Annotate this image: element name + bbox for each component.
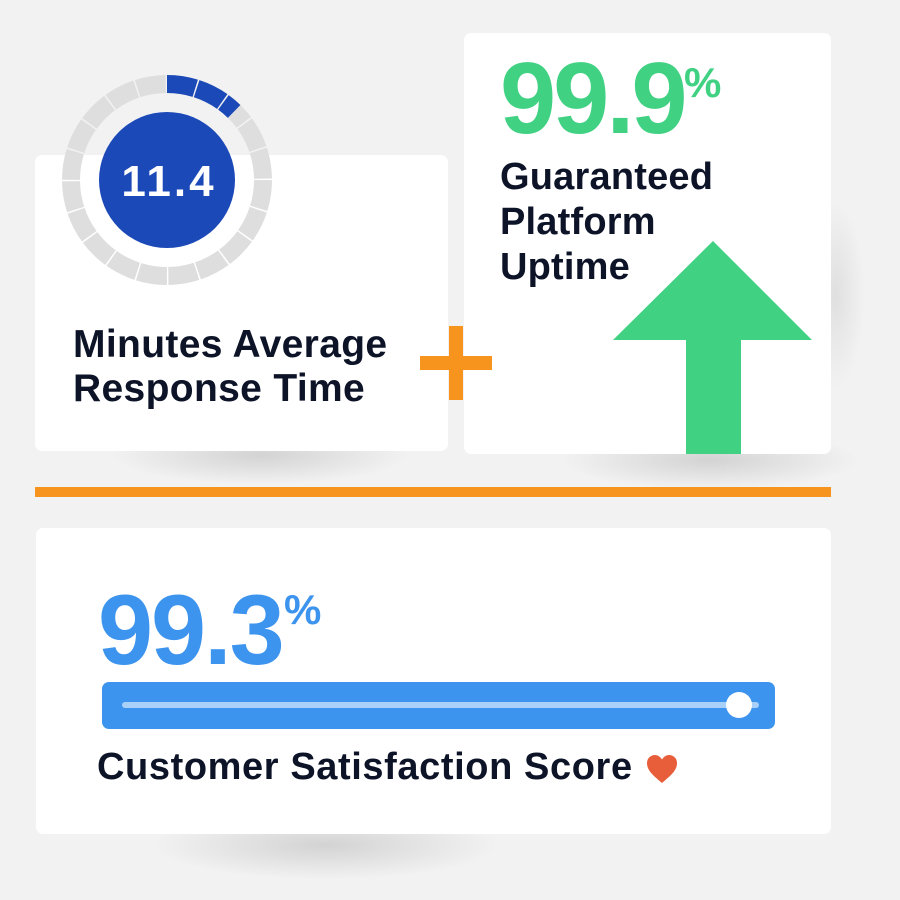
icon: up arrow	[613, 241, 812, 454]
slider	[102, 682, 775, 729]
icon: plus	[420, 326, 492, 400]
divider: orange line	[35, 487, 831, 497]
donut chart	[62, 75, 272, 285]
donut chart: 11.4	[121, 157, 217, 206]
text: 99.3%: %	[284, 586, 321, 633]
text: guaranteed platform uptime: Platform	[500, 201, 656, 243]
text: minutes average response time: Minutes Average	[73, 323, 387, 366]
panel: uptime	[464, 33, 831, 454]
text: guaranteed platform uptime: Guaranteed	[500, 156, 713, 198]
text: minutes average response time: Response Time	[73, 367, 365, 410]
icon: heart	[647, 755, 677, 783]
text: customer satisfaction score: Customer Satisfaction Score	[97, 746, 633, 788]
text: 99.9%: %	[684, 59, 721, 106]
text: guaranteed platform uptime: Uptime	[500, 246, 630, 288]
text: minutes average response time	[73, 323, 387, 410]
panel: response time	[35, 155, 448, 451]
text: 99.3%: 99.3	[98, 574, 283, 685]
text: 99.9%: 99.9	[500, 43, 685, 155]
panel: customer satisfaction	[36, 528, 831, 834]
text: guaranteed platform uptime	[500, 156, 713, 288]
